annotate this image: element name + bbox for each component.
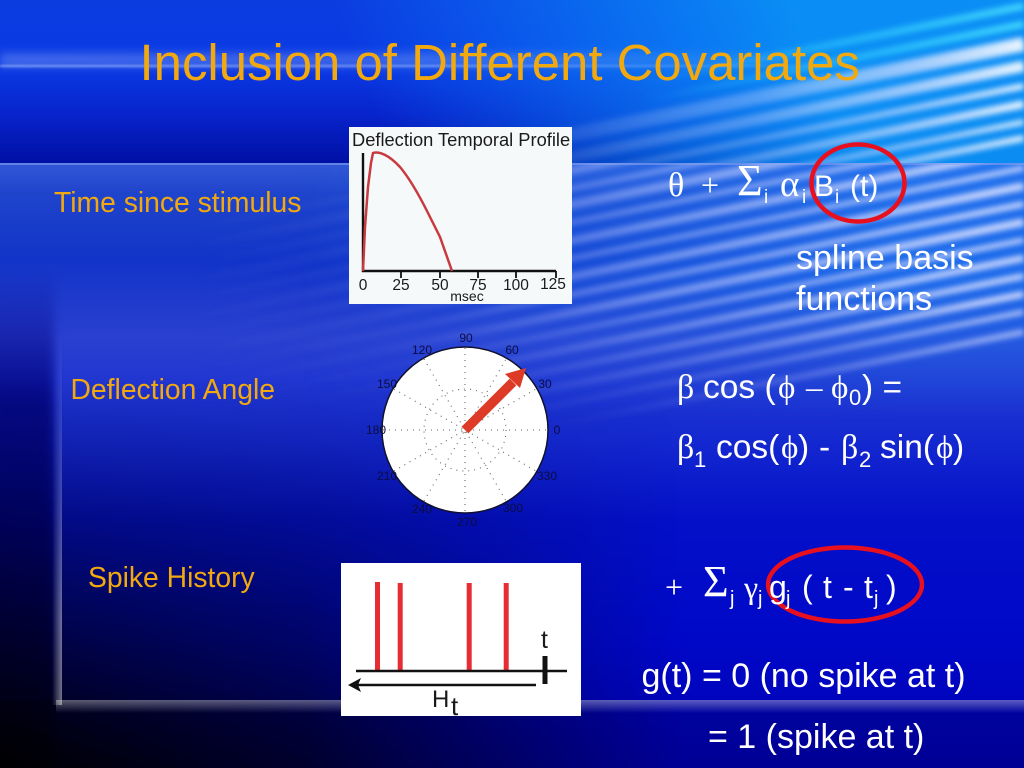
chart: polar deflection angle [366, 331, 561, 529]
red ellipse: basis term [812, 144, 904, 222]
formula: spike history: j [757, 588, 762, 610]
chart: polar deflection angle: 30 [538, 377, 552, 391]
label: time since stimulus: Time since stimulus [54, 186, 301, 218]
formula: time basis: B [814, 170, 834, 203]
text: g no spike: g(t) = 0 (no spike at t) [642, 657, 966, 695]
formula: spike history: - [843, 569, 854, 605]
chart: polar deflection angle: 180 [366, 423, 386, 437]
formula: spike history: g [769, 569, 787, 605]
chart: spike history: t [451, 691, 459, 721]
chart: deflection temporal profile: 125 [540, 276, 566, 293]
formula: time basis: i [802, 187, 806, 208]
chart: polar deflection angle: 300 [503, 501, 523, 515]
formula: cosine [677, 369, 902, 410]
chart: spike history: t [541, 626, 548, 654]
formula: time basis: (t) [850, 170, 878, 203]
formula: expanded cosine: cos( [716, 429, 779, 466]
chart: polar deflection angle: 120 [412, 343, 432, 357]
formula: expanded cosine: - [819, 429, 830, 466]
formula: time basis: i [764, 187, 768, 208]
chart: deflection temporal profile: 0 [359, 277, 368, 294]
formula: time basis: α [780, 164, 799, 205]
chart: deflection temporal profile: 100 [503, 277, 529, 294]
formula: spike history: Σ [703, 557, 729, 606]
formula: spike history: j [785, 588, 790, 610]
chart: polar deflection angle: 270 [457, 515, 477, 529]
formula: spike history: ) [886, 569, 897, 605]
chart: polar deflection angle: 90 [459, 331, 473, 345]
formula: spike history: + [665, 569, 683, 605]
formula: cosine: ϕ [778, 370, 795, 406]
chart: polar deflection angle: 0 [554, 423, 561, 437]
formula: expanded cosine [677, 429, 964, 472]
chart: polar deflection angle: 150 [377, 377, 397, 391]
formula: time basis: i [835, 187, 839, 208]
formula: spike history: t [864, 569, 873, 605]
formula: cosine: cos ( [703, 369, 776, 406]
formula: cosine: β [677, 369, 694, 406]
title: Inclusion of Different Covariates [140, 34, 860, 91]
chart: polar deflection angle: 240 [412, 502, 432, 516]
label: deflection angle: Deflection Angle [70, 373, 275, 405]
formula: spike history: j [729, 588, 734, 610]
text: spline basis functions [796, 239, 974, 318]
formula: time basis: Σ [737, 156, 763, 205]
chart: deflection temporal profile: msec [450, 288, 484, 304]
formula: cosine: – [805, 370, 823, 406]
formula: expanded cosine: sin( [880, 429, 934, 466]
chart: spike history [341, 563, 581, 721]
formula: time basis [668, 156, 878, 208]
formula: expanded cosine: 1 [694, 447, 706, 472]
formula: expanded cosine: ϕ [781, 430, 798, 466]
label: spike history: Spike History [88, 561, 256, 593]
formula: expanded cosine: ϕ [936, 430, 953, 466]
chart: polar deflection angle: 60 [505, 343, 519, 357]
formula: spike history: γ [743, 569, 758, 605]
chart: deflection temporal profile: 50 [431, 277, 449, 294]
formula: spike history: t [823, 569, 832, 605]
text: g spike: = 1 (spike at t) [708, 718, 924, 756]
chart: deflection temporal profile: 75 [469, 277, 487, 294]
formula: cosine: ) = [862, 369, 902, 406]
formula: time basis: + [701, 167, 719, 203]
formula: cosine: ϕ [831, 370, 848, 406]
formula: cosine: 0 [849, 385, 861, 410]
chart: deflection temporal profile: Deflection Temporal Profile [352, 129, 570, 150]
formula: spike history: ( [802, 569, 813, 605]
arrow: deflection direction [465, 368, 526, 430]
red ellipse: history term [768, 548, 922, 622]
chart: polar deflection angle: 330 [537, 469, 557, 483]
formula: expanded cosine: β [841, 429, 858, 466]
formula: expanded cosine: ) [798, 429, 809, 466]
chart: polar deflection angle: 210 [377, 469, 397, 483]
text: spline basis functions: functions [796, 280, 932, 318]
formula: spike history [665, 557, 897, 610]
chart: spike history: H [432, 686, 449, 713]
formula: time basis: θ [668, 167, 684, 204]
formula: expanded cosine: β [677, 429, 694, 466]
formula: spike history: j [873, 588, 878, 610]
chart: deflection temporal profile [349, 127, 572, 304]
formula: expanded cosine: ) [953, 429, 964, 466]
formula: expanded cosine: 2 [859, 447, 871, 472]
text: spline basis functions: spline basis [796, 239, 974, 277]
chart: deflection temporal profile: 25 [392, 277, 410, 294]
